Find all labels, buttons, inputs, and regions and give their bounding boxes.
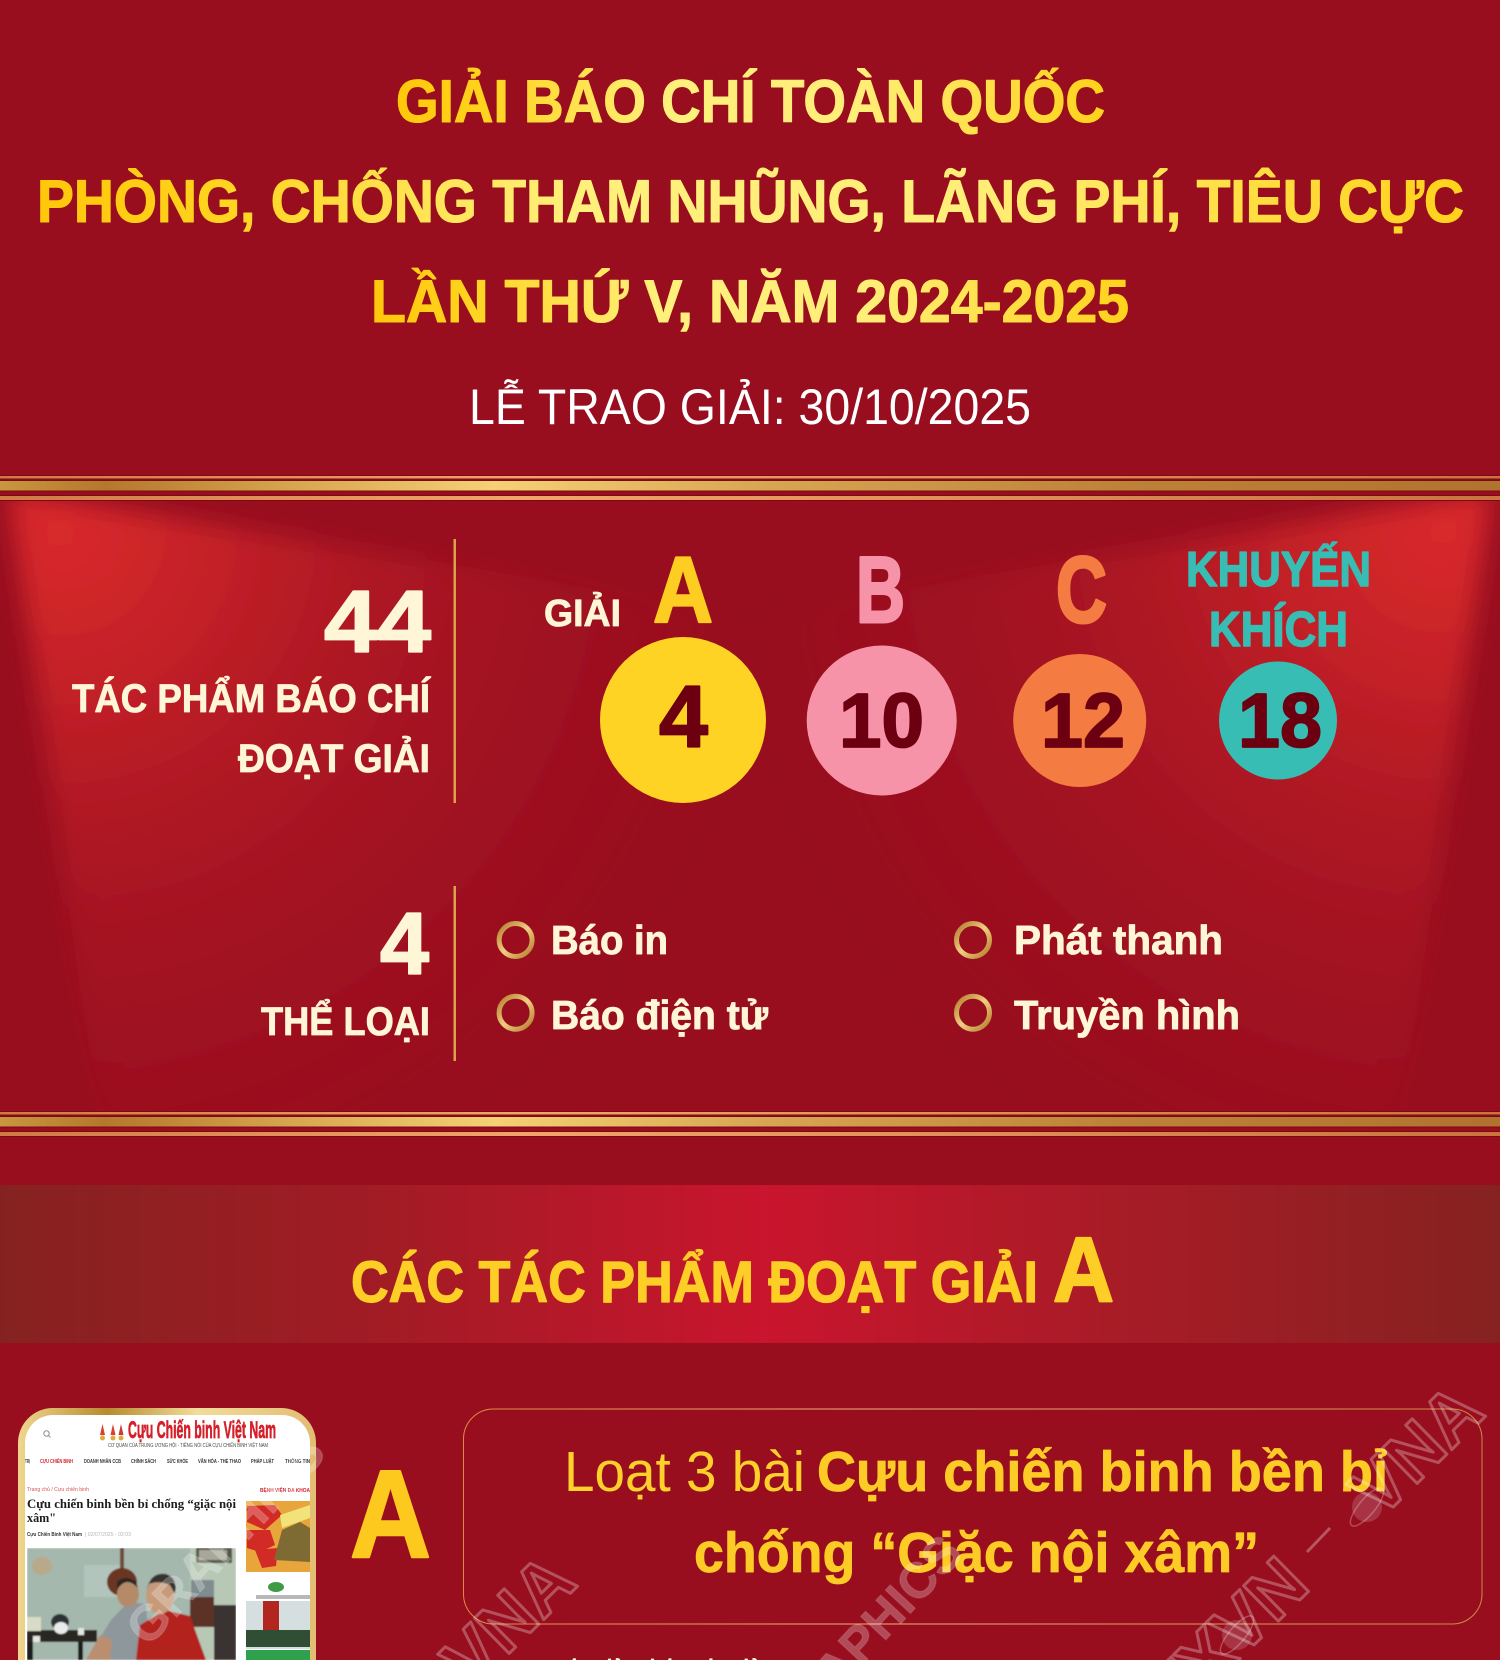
ceremony date: LỄ TRAO GIẢI: 30/10/2025 (469, 379, 1031, 435)
category label: THỂ LOẠI (261, 997, 430, 1044)
article byline: | 02/07/2025 - 02:03 (85, 1532, 131, 1538)
title line 3: LẦN THỨ V, NĂM 2024-2025 (371, 268, 1129, 335)
consolation prize: KHUYẾN (1186, 543, 1371, 597)
category: television: Truyền hình (1014, 992, 1240, 1038)
category: online: Báo điện tử (551, 992, 768, 1038)
prize A: A (653, 537, 713, 642)
prize B: 10 (839, 678, 924, 764)
prize C: 12 (1041, 678, 1125, 764)
navigation bar: SỨC KHỎE (167, 1458, 189, 1465)
title line 1: GIẢI BÁO CHÍ TOÀN QUỐC (396, 68, 1105, 135)
prize letter A: A (350, 1446, 431, 1584)
article screenshot card (18, 1408, 316, 1660)
article headline: Cựu chiến binh bền bỉ chống “giặc nội (27, 1496, 236, 1511)
gold divider bottom (0, 1111, 1500, 1137)
work title line 1: Loạt 3 bài (564, 1440, 805, 1504)
prize B: B (856, 537, 905, 642)
stat: 44 award-winning works (72, 572, 431, 781)
title block (37, 68, 1464, 435)
navigation bar: VĂN HÓA - THỂ THAO (198, 1457, 241, 1465)
label line 1: TÁC PHẨM BÁO CHÍ (72, 674, 431, 721)
masthead tagline: CƠ QUAN CỦA TRUNG ƯƠNG HỘI - TIẾNG NÓI CỦA CỰU CHIẾN BINH VIỆT NAM (108, 1441, 268, 1449)
prize C: C (1056, 537, 1107, 642)
section heading letter A: A (1053, 1219, 1114, 1321)
gold divider top (0, 475, 1500, 501)
category list (499, 917, 1240, 1038)
article byline (27, 1532, 131, 1538)
navigation bar: TRỊ (25, 1459, 30, 1465)
masthead name: Cựu Chiến binh Việt Nam (128, 1417, 276, 1444)
watermark: dash (1307, 1528, 1330, 1552)
work title box (464, 1409, 1482, 1624)
number 44: 44 (324, 572, 431, 671)
section banner (0, 1185, 1500, 1343)
stat: 4 categories (261, 894, 430, 1044)
prize label: GIẢI (544, 591, 621, 635)
sidebar ad poster (246, 1501, 310, 1572)
spotlight background (0, 501, 1500, 1014)
number 4: 4 (380, 894, 429, 993)
watermark: globe upper (1345, 1483, 1389, 1531)
label line 2: ĐOẠT GIẢI (238, 735, 430, 781)
navigation bar: CỰU CHIẾN BINH (40, 1458, 73, 1465)
article photo: two veterans (27, 1548, 236, 1660)
watermark (115, 1369, 1498, 1660)
sidebar ad hospital (246, 1579, 310, 1660)
navigation bar: DOANH NHÂN CCB (84, 1458, 121, 1465)
article headline (27, 1498, 236, 1522)
article headline: xâm" (27, 1510, 56, 1525)
prize breakdown (544, 537, 1371, 803)
sidebar ad heading: BỆNH VIỆN ĐA KHOA (260, 1486, 310, 1494)
search icon (44, 1431, 50, 1438)
prize C (1013, 537, 1146, 787)
navigation bar (25, 1458, 310, 1464)
vertical divider 1 (454, 539, 456, 803)
category: print (499, 917, 668, 963)
work title line 2: chống “Giặc nội xâm” (694, 1521, 1259, 1585)
masthead medals (100, 1424, 124, 1440)
work title box: Cựu chiến binh bền bỉ (817, 1440, 1388, 1504)
breadcrumb: Trang chủ / Cựu chiến binh (27, 1486, 89, 1493)
category: radio: Phát thanh (1014, 917, 1223, 963)
consolation prize (1186, 543, 1371, 780)
prize A: 4 (659, 667, 708, 766)
navigation bar: PHÁP LUẬT (251, 1458, 274, 1465)
navigation bar: THÔNG TIN (285, 1457, 310, 1465)
consolation prize: KHÍCH (1209, 603, 1348, 657)
prize B (807, 537, 957, 796)
watermark: VNA top right: VNA (1335, 1369, 1498, 1531)
watermark: globe lower (1215, 1611, 1259, 1659)
navigation bar: CHÍNH SÁCH (131, 1457, 156, 1465)
section heading: CÁC TÁC PHẨM ĐOẠT GIẢI (351, 1250, 1038, 1315)
article byline: Cựu Chiến Binh Việt Nam (27, 1531, 82, 1538)
prize A (600, 537, 766, 803)
vertical divider 2 (454, 886, 456, 1061)
consolation prize: 18 (1238, 678, 1322, 764)
category: print: Báo in (551, 917, 668, 963)
watermark: GRAPHICS card: GRAPHICS (115, 1424, 336, 1656)
